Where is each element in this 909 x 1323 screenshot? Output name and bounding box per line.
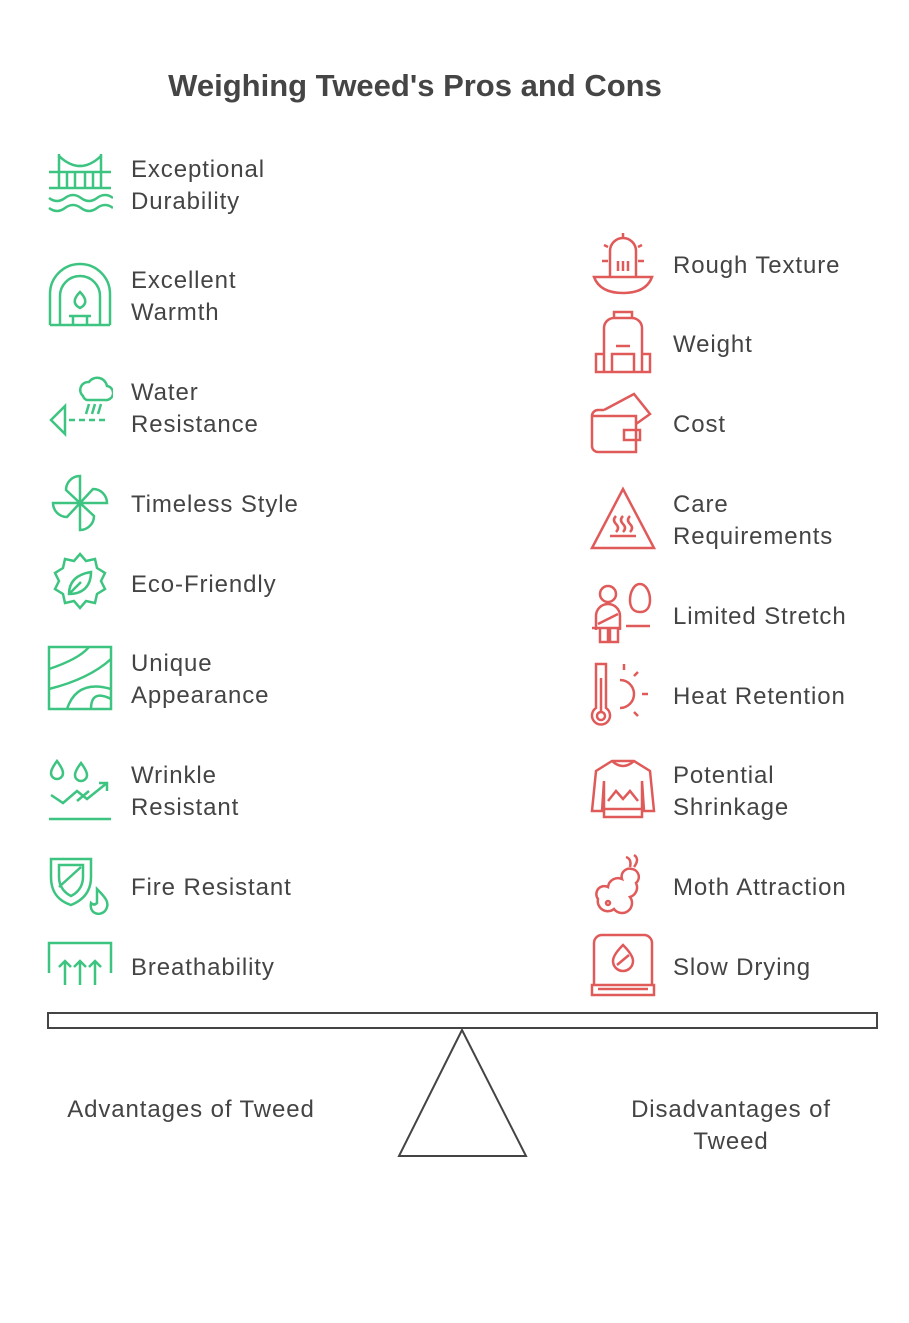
text bbox=[131, 650, 269, 709]
pro: Fire Resistant bbox=[50, 858, 292, 916]
icon: vent arrows bbox=[48, 942, 112, 985]
pro: Timeless Style bbox=[52, 474, 299, 532]
label: advantages: Advantages of Tweed bbox=[67, 1096, 315, 1123]
text: Limited Stretch bbox=[673, 603, 847, 630]
con: Slow Drying bbox=[590, 933, 890, 1003]
text bbox=[131, 762, 239, 821]
text: Heat Retention bbox=[673, 683, 846, 710]
icon: fireplace bbox=[48, 262, 112, 326]
label: disadvantages: Disadvantages of bbox=[631, 1096, 831, 1123]
label: disadvantages bbox=[580, 1094, 882, 1158]
pro: Unique Appearance bbox=[48, 646, 269, 710]
text: Cost bbox=[673, 411, 726, 438]
pro: Eco-Friendly bbox=[53, 552, 277, 610]
text: Weight bbox=[673, 331, 753, 358]
text bbox=[131, 267, 236, 326]
icon: person egg bbox=[592, 582, 652, 644]
pro: Wrinkle Resistant bbox=[49, 759, 239, 821]
text bbox=[673, 491, 833, 550]
text bbox=[131, 379, 259, 438]
icon: bridge bbox=[48, 154, 113, 212]
icon: cactus bbox=[592, 233, 654, 294]
text: Warmth bbox=[131, 299, 220, 326]
icon: drops arrows bbox=[49, 759, 111, 820]
con: Heat Retention bbox=[590, 662, 846, 726]
icon: rain cloud bbox=[49, 376, 113, 437]
text: Slow Drying bbox=[673, 954, 811, 981]
icon: gear leaf bbox=[53, 552, 107, 610]
icon: backpack bbox=[594, 310, 652, 374]
icon: pattern square bbox=[48, 646, 112, 710]
text: Potential bbox=[673, 762, 774, 789]
text: Moth Attraction bbox=[673, 874, 847, 901]
pro: Water Resistance bbox=[49, 376, 259, 438]
text: Excellent bbox=[131, 267, 236, 294]
text: Water bbox=[131, 379, 199, 406]
text: Unique bbox=[131, 650, 212, 677]
text: Fire Resistant bbox=[131, 874, 292, 901]
con: Weight bbox=[594, 310, 753, 374]
con: Care Requirements bbox=[590, 486, 833, 550]
icon: shield flame bbox=[50, 858, 109, 916]
pro: Exceptional Durability bbox=[48, 154, 265, 215]
text: Resistance bbox=[131, 411, 259, 438]
text: Timeless Style bbox=[131, 491, 299, 518]
icon: wallet bbox=[590, 392, 652, 454]
icon: thermometer sun bbox=[590, 662, 648, 726]
text bbox=[131, 156, 265, 215]
fulcrum bbox=[399, 1030, 526, 1156]
con: Potential Shrinkage bbox=[590, 760, 789, 821]
text: Resistant bbox=[131, 794, 239, 821]
text: Durability bbox=[131, 188, 240, 215]
text: Appearance bbox=[131, 682, 269, 709]
con: Moth Attraction bbox=[590, 853, 890, 923]
text: Shrinkage bbox=[673, 794, 789, 821]
con: Rough Texture bbox=[592, 233, 840, 294]
text: Rough Texture bbox=[673, 252, 840, 279]
pro: Breathability bbox=[48, 942, 275, 985]
text: Wrinkle bbox=[131, 762, 217, 789]
pro: Excellent Warmth bbox=[48, 262, 236, 326]
label: disadvantages: Tweed bbox=[693, 1128, 769, 1155]
pros list bbox=[48, 154, 299, 985]
icon: pinwheel bbox=[52, 474, 108, 532]
text bbox=[673, 760, 789, 824]
icon: towel bbox=[590, 933, 656, 999]
beam bbox=[48, 1013, 877, 1028]
cons list bbox=[590, 233, 847, 996]
text: Exceptional bbox=[131, 156, 265, 183]
icon: warning heat bbox=[590, 486, 656, 550]
icon: larva bbox=[590, 853, 656, 919]
con: Limited Stretch bbox=[592, 582, 847, 644]
title: Weighing Tweed's Pros and Cons bbox=[168, 68, 662, 103]
text: Eco-Friendly bbox=[131, 571, 277, 598]
text: Breathability bbox=[131, 954, 275, 981]
icon: sweater bbox=[590, 760, 656, 818]
text: Requirements bbox=[673, 523, 833, 550]
text: Care bbox=[673, 491, 729, 518]
con: Cost bbox=[590, 392, 726, 454]
